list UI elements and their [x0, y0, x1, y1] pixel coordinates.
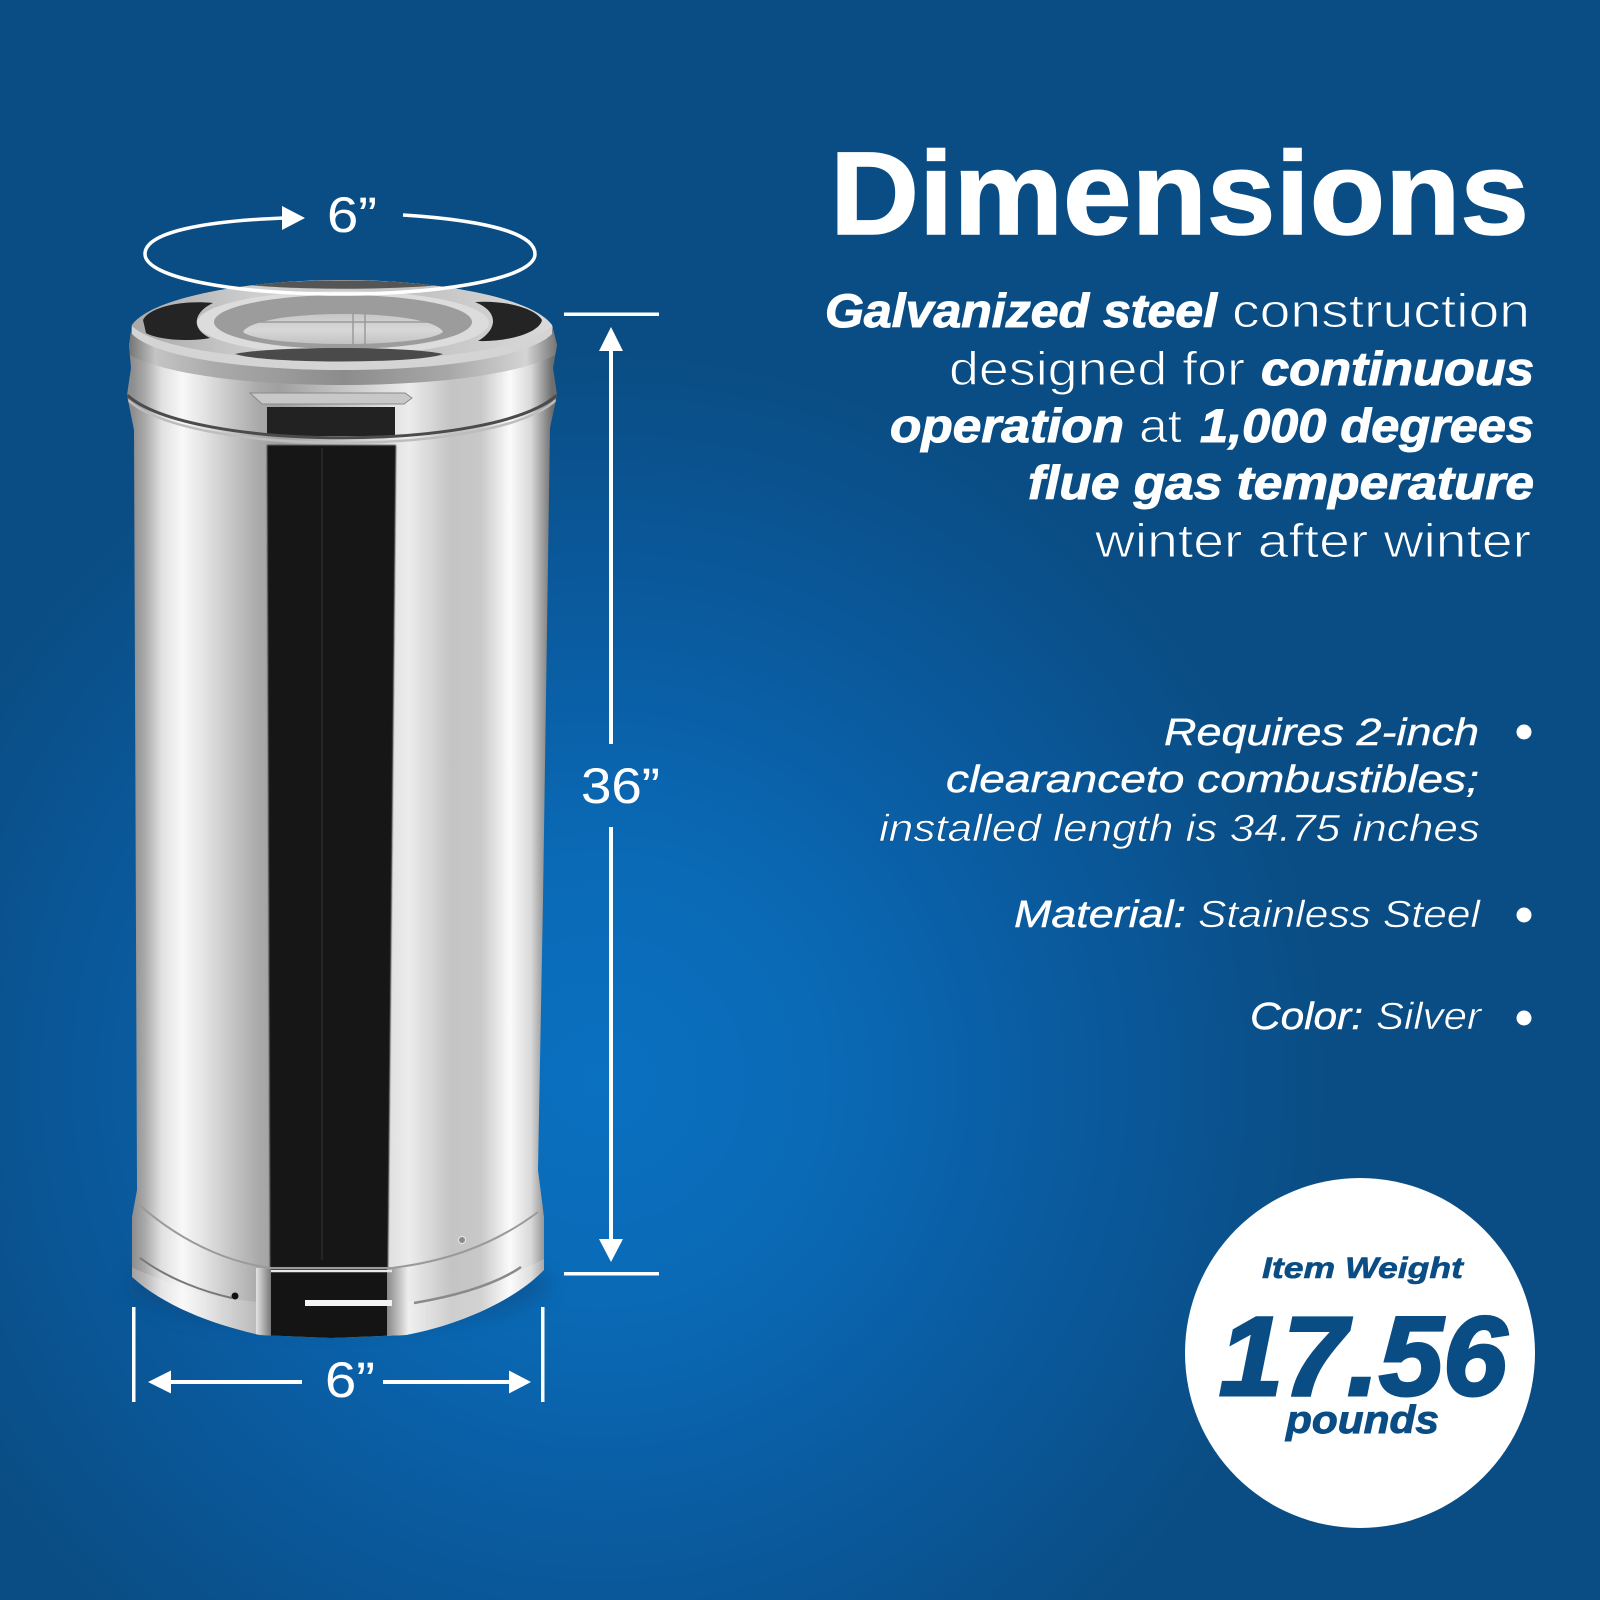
ring arrowhead: [282, 206, 305, 230]
collar strip left: [256, 1268, 271, 1343]
top plate: [131, 280, 553, 370]
white flange around the flue: [197, 291, 489, 355]
liner cross: [258, 314, 428, 344]
bullet list: installed length is 34.75 inches: [879, 808, 1480, 850]
line 1: Galvanized steel: [825, 284, 1218, 337]
right air slot: [475, 302, 542, 341]
description text: [825, 284, 1534, 567]
pipe body: [120, 270, 565, 1345]
crimp highlight: [305, 1300, 392, 1306]
inner flue opening: [214, 295, 472, 349]
crimp dot: [232, 1292, 238, 1300]
collar highlight: [132, 1259, 544, 1334]
bullet list: Silver: [1376, 996, 1482, 1038]
bottom tick: [564, 1272, 659, 1276]
bullet 3 dot: [1516, 1010, 1532, 1026]
height label: 36”: [581, 758, 660, 814]
bullet list: Stainless Steel: [1198, 894, 1482, 936]
left tick: [132, 1307, 136, 1402]
inner liner: [243, 314, 443, 344]
ring arc: [145, 215, 535, 294]
badge label: Item Weight: [1262, 1252, 1465, 1285]
line 3: operation: [890, 399, 1124, 452]
plate lip: [132, 326, 552, 370]
collar strip right: [387, 1268, 408, 1343]
description text: continuous: [1261, 342, 1534, 395]
bullet 2 dot: [1516, 908, 1532, 922]
description text: construction: [1232, 284, 1530, 337]
pipe shadow: [126, 1241, 550, 1329]
item weight badge: [1185, 1178, 1535, 1528]
reflection seam: [321, 448, 323, 1260]
lower crimp lines: [140, 1258, 232, 1298]
dark reflection band: [267, 445, 396, 1268]
weight value: 17.56: [1219, 1294, 1508, 1419]
top edge: [248, 280, 440, 289]
width label: 6”: [325, 1352, 375, 1408]
tab: [250, 393, 412, 404]
upper dark reflection: [267, 407, 395, 436]
stainless steel pipe: [120, 270, 565, 1345]
front air slot: [235, 348, 443, 362]
width dimension: [132, 1307, 544, 1408]
groove lines: [127, 395, 557, 438]
bullet 1 dot: [1516, 724, 1532, 740]
height dimension: [564, 312, 660, 1276]
collar groove: [137, 1203, 538, 1268]
rim band: [125, 325, 560, 385]
top tick: [564, 312, 659, 316]
description text: at: [1139, 399, 1182, 452]
line 4: flue gas temperature: [1028, 456, 1534, 509]
weight unit: pounds: [1285, 1399, 1439, 1442]
bullet 3 text: Color:: [1250, 996, 1363, 1038]
circumference dimension: [145, 187, 535, 294]
ring label: 6”: [327, 187, 377, 243]
right tick: [541, 1307, 544, 1402]
bullet 2 text: Material:: [1014, 894, 1186, 936]
collar dark section: [271, 1268, 387, 1343]
bullet 1 text: Requires 2-inch: [1164, 712, 1479, 754]
bullet list: clearanceto combustibles;: [946, 759, 1479, 801]
badge circle: [1185, 1178, 1535, 1528]
right arrow: [383, 1370, 531, 1394]
upper arrow: [599, 327, 623, 744]
title: Dimensions: [830, 128, 1529, 260]
lower arrow: [599, 827, 623, 1262]
rivet: [458, 1236, 466, 1244]
description text: 1,000 degrees: [1200, 399, 1534, 452]
line 5: winter after winter: [1094, 514, 1531, 567]
left air slot: [143, 302, 213, 340]
left arrow: [148, 1370, 302, 1394]
line 2: designed for: [949, 342, 1245, 395]
bullet list: [879, 712, 1532, 1038]
